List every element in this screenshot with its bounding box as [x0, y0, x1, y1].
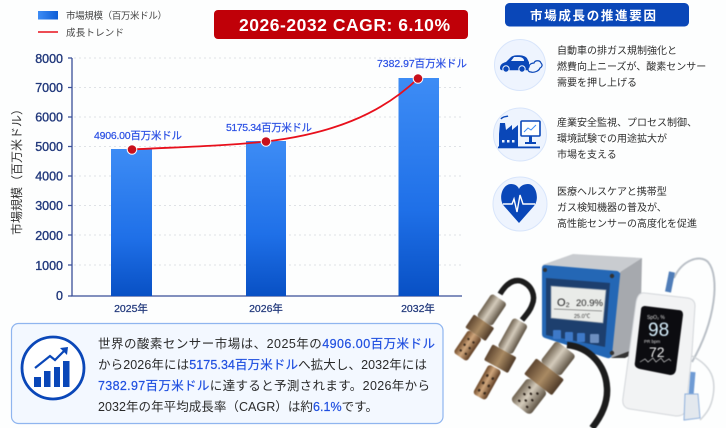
- callout panel: [12, 324, 443, 424]
- driver 1 text: 自動車の排ガス規制強化と: [557, 44, 677, 57]
- CAGR banner: 2026-2032 CAGR: 6.10%: [239, 15, 450, 35]
- driver 2: industry: [494, 108, 697, 161]
- driver 3: healthcare: [493, 177, 697, 231]
- product photo: sensors, analyser and oximeter: [450, 254, 715, 428]
- data labels: 4906.00百万米ドル: [94, 129, 182, 142]
- data labels: [94, 57, 467, 142]
- drivers heading: [505, 3, 689, 26]
- CAGR banner: [214, 10, 468, 39]
- oximeter body: PR bpm: [644, 339, 661, 344]
- callout text: 7382.97百万米ドルに達すると予測されます。2026年から: [98, 379, 430, 393]
- y axis: 1000: [35, 259, 63, 273]
- driver 3 text: 高性能センサーの高度化を促進: [557, 217, 697, 230]
- legend: 市場規模（百万米ドル）: [66, 10, 167, 22]
- driver 3 text: 医療ヘルスケアと携帯型: [557, 185, 667, 198]
- y axis: 7000: [35, 81, 63, 95]
- oximeter cables: [668, 259, 715, 420]
- driver 1 text: [557, 44, 706, 89]
- driver 2 text: [557, 116, 697, 161]
- icon: heart with pulse: [493, 177, 547, 231]
- icon: rising bar chart: [22, 337, 84, 399]
- y axis: 3000: [35, 199, 63, 213]
- driver 2 text: 環境試験での用途拡大が: [557, 132, 667, 145]
- sensor cable back: [500, 281, 534, 320]
- driver 1 text: 燃費向上ニーズが、酸素センサー: [557, 60, 706, 73]
- oximeter body: 98: [648, 320, 669, 341]
- y axis: 2000: [35, 229, 63, 243]
- legend: 成長トレンド: [66, 27, 124, 39]
- y axis: [35, 52, 462, 303]
- data labels: 7382.97百万米ドル: [377, 57, 467, 70]
- callout text: 2032年の年平均成長率（CAGR）は約6.1%です。: [98, 399, 378, 414]
- legend: [38, 10, 167, 39]
- icon: factory and monitor: [494, 108, 546, 161]
- y axis: 6000: [35, 110, 63, 124]
- oximeter body: 72: [649, 344, 665, 360]
- x axis labels: 2025年: [114, 302, 148, 315]
- oximeter body: SpO₂ %: [647, 315, 665, 321]
- y axis title: 市場規模（百万米ドル）: [9, 103, 24, 235]
- bar 2032: [398, 78, 439, 296]
- driver 2 text: 産業安全監視、プロセス制御、: [557, 116, 697, 129]
- drivers heading: 市場成長の推進要因: [530, 8, 656, 23]
- driver 3 text: ガス検知機器の普及が、: [557, 201, 667, 214]
- driver 1: automotive: [494, 40, 706, 90]
- analyser front panel: O₂: [557, 297, 570, 309]
- y axis: 0: [56, 289, 63, 303]
- lower probe connector: [684, 394, 700, 420]
- oxygen sensor 1: [450, 292, 510, 364]
- icon: car and exhaust: [494, 40, 546, 90]
- callout text: [98, 336, 435, 414]
- oxygen sensor 2: [467, 315, 533, 404]
- y axis: 8000: [35, 52, 63, 66]
- driver 1 text: 需要を押し上げる: [557, 76, 637, 89]
- y axis: 5000: [35, 140, 63, 154]
- analyser front panel: [542, 265, 620, 358]
- x axis labels: 2032年: [401, 302, 435, 315]
- y axis: 4000: [35, 170, 63, 184]
- oximeter body: [623, 293, 695, 416]
- driver 2 text: 市場を支える: [557, 148, 617, 161]
- bar 2025: [111, 149, 152, 296]
- trend line: [127, 74, 423, 154]
- bar chart: [9, 52, 467, 315]
- data labels: 5175.34百万米ドル: [226, 121, 312, 134]
- x axis labels: 2026年: [249, 302, 283, 315]
- analyser side and top: [542, 254, 642, 358]
- callout text: 世界の酸素センサー市場は、2025年の4906.00百万米ドル: [98, 336, 435, 351]
- bar 2026: [246, 141, 286, 296]
- oxygen sensor 3: [506, 337, 607, 428]
- x axis labels: [114, 302, 435, 315]
- analyser front panel: 20.9%: [576, 298, 603, 309]
- analyser front panel: 25.0℃: [574, 313, 591, 320]
- driver 3 text: [557, 185, 697, 230]
- callout text: から2026年には5175.34百万米ドルへ拡大し、2032年には: [98, 358, 427, 372]
